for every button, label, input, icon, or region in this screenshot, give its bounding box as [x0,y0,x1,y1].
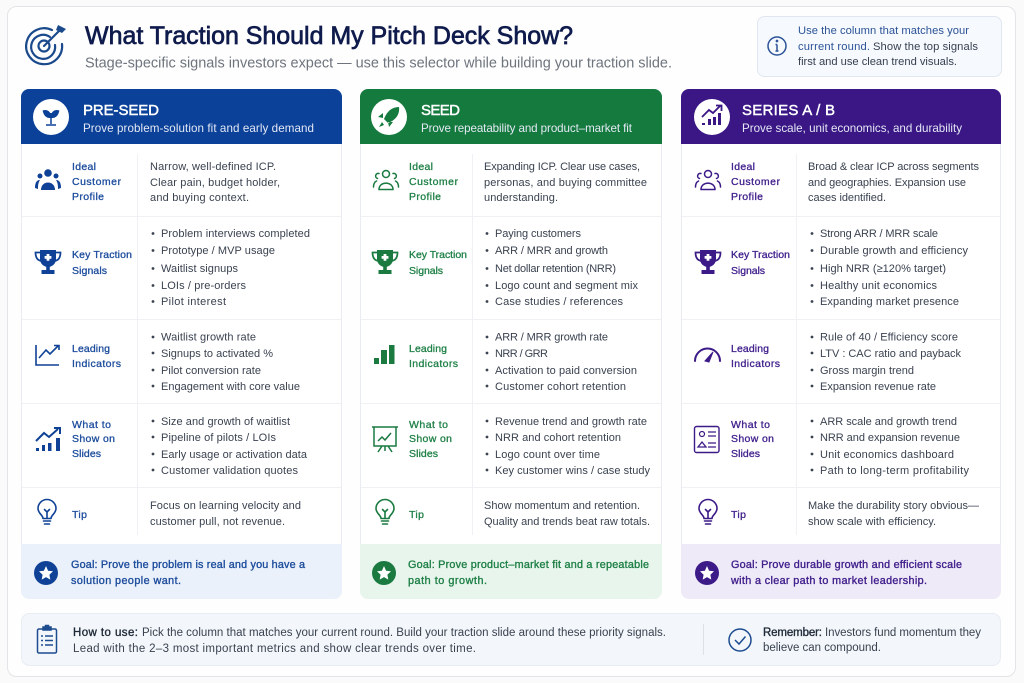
row: key traction signals: Key Traction [72,249,132,261]
row: ideal customer profile: Customer [72,176,122,188]
row: ideal customer profile: Profile [72,191,104,203]
row: leading indicators: Customer cohort retention [495,381,626,393]
row: key traction signals: LOIs / pre-orders [161,280,246,292]
row: what to show on slides: Pipeline of pilots / LOIs [161,432,276,444]
row: leading indicators: Engagement with core value [161,381,300,393]
row: tip: Tip [72,509,87,521]
row: key traction signals: Signals [409,265,443,277]
row: what to show on slides: ARR scale and growth trend [820,416,957,428]
panel: series a/b column [681,89,1001,599]
row: key traction signals: Durable growth and efficiency [820,245,968,257]
row: leading indicators: Indicators [409,358,458,370]
row: leading indicators: Activation to paid conversion [495,365,637,377]
row: what to show on slides: What to [409,419,448,431]
row: what to show on slides: Show on [409,433,452,445]
row: leading indicators: Rule of 40 / Efficiency score [820,332,958,344]
row: ideal customer profile: personas, and buying committee [484,177,647,189]
row: what to show on slides: Early usage or activation data [161,449,308,461]
row: what to show on slides: Revenue trend and growth rate [495,416,647,428]
row: what to show on slides: Slides [731,448,760,460]
icon: clipboard [38,626,56,653]
row: leading indicators: Indicators [731,358,780,370]
callout: info box [758,16,1002,76]
row: ideal customer profile: Ideal [409,161,433,173]
row: ideal customer profile: and buying context. [150,192,249,204]
row: ideal customer profile: understanding. [484,192,558,204]
row: leading indicators: LTV : CAC ratio and payback [820,348,962,360]
callout text: first and use clean trend visuals. [798,56,957,68]
header: pre-seed [21,89,342,144]
row: what to show on slides: Unit economics dashboard [820,449,954,461]
row: ideal customer profile: Ideal [72,161,96,173]
row: what to show on slides: Show on [72,433,115,445]
goal: seed [360,544,662,599]
how to use text [73,627,666,655]
callout text: current round. [798,41,870,53]
row: leading indicators: Waitlist growth rate [161,332,256,344]
row: key traction signals [696,228,968,308]
row: key traction signals: Expanding market presence [820,296,959,308]
goal: pre-seed: Goal: Prove the problem is real and you have a [71,559,305,571]
row: key traction signals: Logo count and segment mix [495,280,638,292]
row: tip: Show momentum and retention. [484,500,640,512]
header: series a/b: SERIES A / B [742,102,835,119]
icon: check circle [729,629,751,651]
row: key traction signals [372,228,638,308]
row: what to show on slides: NRR and cohort retention [495,432,621,444]
callout text: Use the column that matches your [798,25,969,37]
row: leading indicators [36,332,300,393]
row: tip [376,500,650,528]
header: series a/b [681,89,1001,144]
row: what to show on slides [372,416,650,477]
how to use text: How to use: [73,627,138,639]
row: leading indicators: Gross margin trend [820,365,914,377]
goal: seed: path to growth. [408,575,487,587]
how to use text: Lead with the 2–3 most important metrics and show clear trends over time. [73,643,476,655]
row: key traction signals: Pilot interest [161,296,226,308]
remember text: Investors fund momentum they [825,627,981,639]
icon: info [768,37,786,55]
row: tip: customer pull, not revenue. [150,516,285,528]
row: tip: Focus on learning velocity and [150,500,301,512]
row: ideal customer profile: and geographies. Expansion use [808,177,966,189]
row: what to show on slides: Customer validation quotes [161,465,298,477]
row: ideal customer profile: Ideal [731,161,755,173]
row: what to show on slides: Slides [72,448,101,460]
row: what to show on slides: NRR and expansion revenue [820,432,960,444]
row: tip: Make the durability story obvious— [808,500,979,512]
row: ideal customer profile: Broad & clear ICP across segments [808,161,980,173]
row: ideal customer profile: Customer [731,176,780,188]
row: key traction signals: Healthy unit economics [820,280,938,292]
row: key traction signals: Problem interviews completed [161,228,310,240]
title: What Traction Should My Pitch Deck Show? [85,22,573,50]
how to use text: Pick the column that matches your current round. Build your traction slide around these priority signals. [142,627,666,639]
row: what to show on slides: What to [72,419,111,431]
row: key traction signals: Signals [72,265,107,277]
row: ideal customer profile: Profile [731,191,763,203]
remember text: believe can compound. [763,642,881,654]
row: leading indicators [374,332,637,393]
row: leading indicators: Leading [731,343,769,355]
row: leading indicators: NRR / GRR [495,348,548,360]
remember text [763,627,981,654]
row: tip: Tip [731,509,746,521]
row: key traction signals: Strong ARR / MRR scale [820,228,938,240]
row: key traction signals: Net dollar retention (NRR) [495,263,616,275]
row: what to show on slides: Size and growth of waitlist [161,416,290,428]
row: ideal customer profile: Customer [409,176,458,188]
row: key traction signals: Case studies / references [495,296,624,308]
row: key traction signals: Prototype / MVP usage [161,245,275,257]
row: tip: show scale with efficiency. [808,516,936,528]
goal: pre-seed [21,544,342,599]
row: ideal customer profile [696,161,980,204]
row: key traction signals [36,228,310,308]
panel: how to use footer [22,614,1000,666]
row: what to show on slides [694,416,970,477]
header: series a/b: Prove scale, unit economics, and durability [742,122,962,135]
callout text [798,25,978,68]
goal: series a/b: Goal: Prove durable growth and efficient scale [731,559,962,571]
row: tip: Quality and trends beat raw totals. [484,516,650,528]
row: ideal customer profile: cases identified. [808,192,886,204]
panel: pre-seed column [21,89,342,599]
row: key traction signals: Waitlist signups [161,263,238,275]
panel: seed column [360,89,662,599]
row: key traction signals: ARR / MRR and growth [495,245,608,257]
row: ideal customer profile [35,161,280,204]
row: ideal customer profile: Narrow, well-defined ICP. [150,161,276,173]
row: leading indicators: Leading [72,343,110,355]
row: key traction signals: Signals [731,265,765,277]
goal: pre-seed: solution people want. [71,575,181,587]
row: what to show on slides: What to [731,419,770,431]
row: tip [699,500,979,528]
row: ideal customer profile: Profile [409,191,441,203]
row: leading indicators: ARR / MRR growth rate [495,332,608,344]
row: what to show on slides: Slides [409,448,438,460]
row: tip: Tip [409,509,424,521]
row: what to show on slides: Logo count over time [495,449,600,461]
header: seed [360,89,662,144]
goal: series a/b: with a clear path to market leadership. [730,575,927,587]
row: ideal customer profile [374,161,647,204]
row: key traction signals: High NRR (≥120% target) [820,263,946,275]
callout text: Show the top signals [873,41,978,53]
row: what to show on slides: Key customer wins / case study [495,465,650,477]
row: leading indicators: Indicators [72,358,121,370]
row: what to show on slides: Show on [731,433,774,445]
row: leading indicators: Leading [409,343,447,355]
row: key traction signals: Key Traction [731,249,790,261]
row: tip [38,500,301,528]
row: what to show on slides: Path to long-term profitability [820,465,970,477]
header: pre-seed: Prove problem-solution fit and early demand [83,122,314,135]
row: leading indicators: Pilot conversion rate [161,365,261,377]
header: seed: SEED [421,102,460,119]
row: key traction signals: Paying customers [495,228,582,240]
header: seed: Prove repeatability and product–market fit [421,122,633,135]
remember text: Remember: [763,627,822,639]
row: leading indicators [695,332,962,393]
goal: seed: Goal: Prove product–market fit and a repeatable [408,559,649,571]
icon: target with arrow [26,25,66,64]
header: pre-seed: PRE-SEED [83,102,159,119]
row: ideal customer profile: Clear pain, budget holder, [150,177,280,189]
row: what to show on slides [36,416,308,477]
subtitle: Stage-specific signals investors expect — use this selector while building your traction slide. [85,56,672,72]
row: ideal customer profile: Expanding ICP. Clear use cases, [484,161,640,173]
row: leading indicators: Signups to activated % [161,348,273,360]
goal: series a/b [681,544,1001,599]
row: leading indicators: Expansion revenue rate [820,381,936,393]
row: key traction signals: Key Traction [409,249,467,261]
